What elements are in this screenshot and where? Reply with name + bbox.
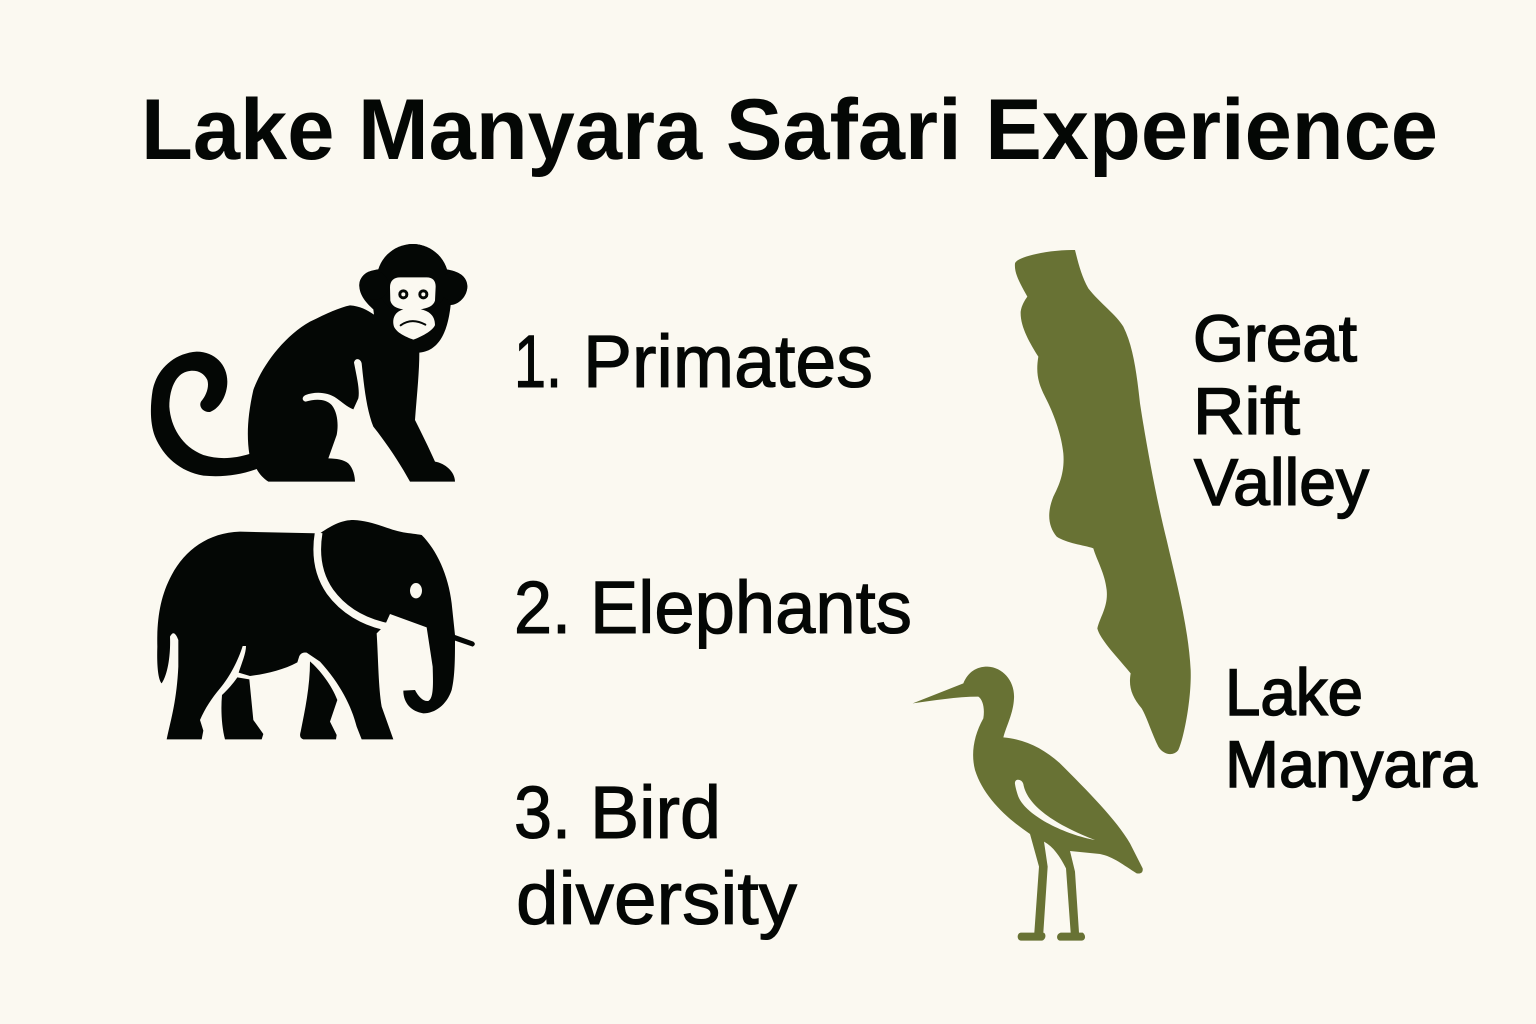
label: primates: Primates bbox=[583, 320, 873, 403]
label: lake manyara: Lake bbox=[1225, 655, 1363, 729]
map: great rift valley with lake manyara bbox=[1015, 250, 1191, 754]
elephant far front leg bbox=[300, 661, 337, 739]
icon: monkey bbox=[151, 244, 467, 482]
icon: heron bird bbox=[913, 667, 1143, 941]
label: lake manyara: Manyara bbox=[1225, 727, 1477, 801]
icon: elephant bbox=[157, 520, 475, 739]
bird wing line bbox=[1015, 780, 1095, 840]
label: elephants: 2. bbox=[514, 566, 571, 649]
label: primates: 1. bbox=[514, 320, 562, 403]
elephant eye bbox=[410, 583, 422, 598]
elephant near hind leg bbox=[221, 677, 263, 739]
label: bird diversity: diversity bbox=[516, 857, 797, 940]
label: bird diversity: Bird bbox=[590, 771, 721, 854]
label: bird diversity: 3. bbox=[514, 771, 571, 854]
elephant ear line bbox=[317, 533, 387, 627]
label: elephants: Elephants bbox=[590, 566, 912, 649]
monkey mouth bbox=[401, 321, 425, 325]
monkey face bbox=[390, 277, 436, 340]
label: great rift valley: Great bbox=[1193, 301, 1357, 375]
label: great rift valley bbox=[1193, 301, 1369, 519]
label: lake manyara bbox=[1225, 655, 1477, 801]
label: bird diversity bbox=[514, 771, 797, 940]
monkey eyes bbox=[398, 289, 428, 299]
title: Lake Manyara Safari Experience bbox=[141, 82, 1438, 178]
label: great rift valley: Valley bbox=[1194, 445, 1369, 519]
monkey head and ears bbox=[359, 244, 467, 316]
label: great rift valley: Rift bbox=[1193, 374, 1300, 448]
